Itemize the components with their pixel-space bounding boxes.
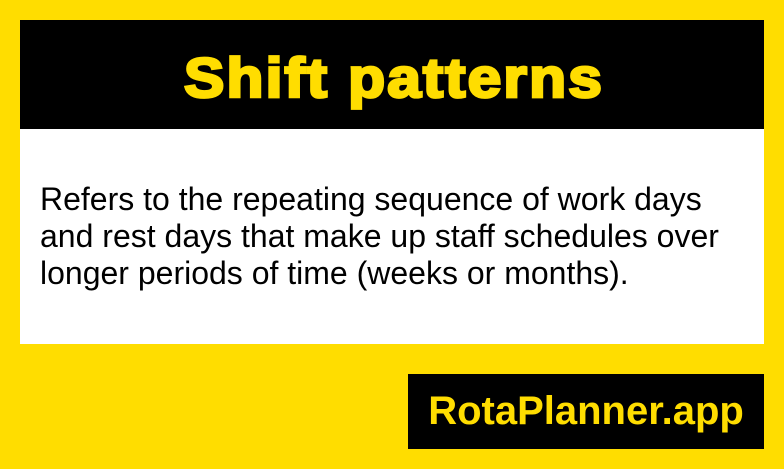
header banner xyxy=(20,20,764,129)
definition text: Refers to the repeating sequence of work days xyxy=(40,181,702,217)
brand badge xyxy=(408,374,764,449)
definition text xyxy=(40,181,719,291)
title: Shift patterns xyxy=(183,46,604,109)
panel: definition xyxy=(20,129,764,344)
definition text: and rest days that make up staff schedules over xyxy=(40,218,719,254)
brand badge: RotaPlanner.app xyxy=(428,389,744,433)
definition text: longer periods of time (weeks or months). xyxy=(40,255,629,291)
